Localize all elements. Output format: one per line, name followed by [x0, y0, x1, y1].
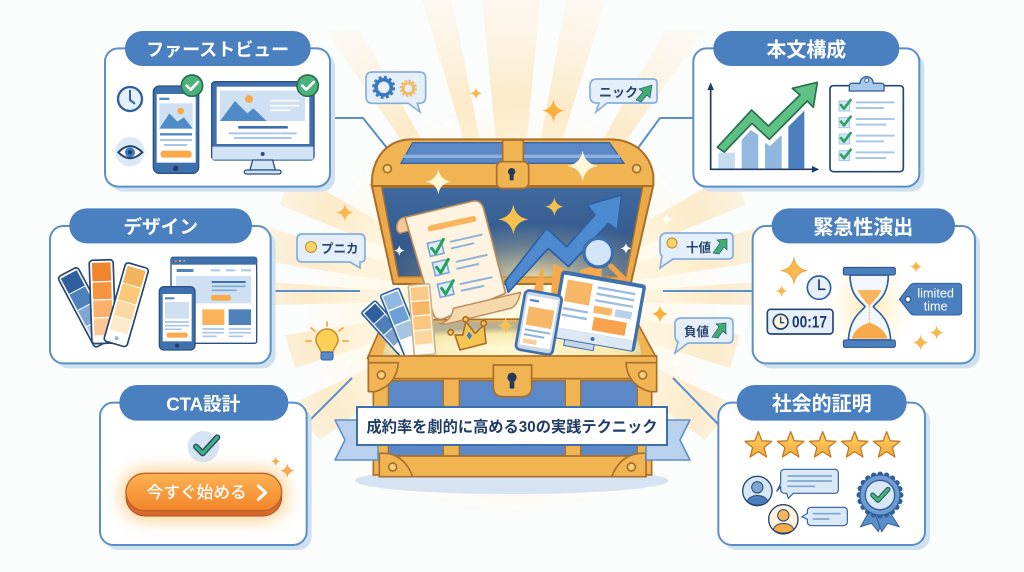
heading pill	[772, 208, 955, 243]
heading pill: ファーストビュー	[146, 39, 289, 60]
heading pill	[119, 385, 288, 421]
phone in chest	[515, 290, 562, 355]
sparkles	[776, 257, 944, 351]
icon: check	[188, 431, 219, 462]
panel frame	[105, 48, 335, 192]
title banner	[335, 407, 690, 460]
chest lock	[493, 365, 532, 397]
bubble: gears	[366, 72, 426, 112]
treasure chest	[355, 139, 668, 494]
CTA button	[126, 473, 282, 516]
heading pill: デザイン	[123, 216, 198, 237]
heading pill: 本文構成	[766, 38, 846, 62]
heading pill	[713, 31, 899, 66]
bubble: nick: ニック	[599, 85, 638, 100]
phone	[159, 287, 195, 350]
chest opening	[367, 318, 657, 358]
light rays	[270, 0, 755, 440]
connector lines	[271, 118, 753, 424]
bubble: value up: 十値	[686, 240, 712, 255]
CTA button: 今すぐ始める	[147, 483, 247, 502]
browser window	[171, 257, 257, 343]
badge: monitor check	[297, 75, 318, 96]
hourglass glow	[824, 253, 914, 360]
chest lid interior	[372, 185, 653, 284]
comment bubble	[802, 507, 847, 526]
comment bubble	[777, 469, 838, 498]
clipboard	[830, 77, 903, 172]
panel: first view	[105, 31, 335, 192]
panel: social proof	[718, 385, 930, 550]
corner brackets	[368, 363, 657, 477]
chest shadow	[355, 467, 668, 494]
bubble: value: 負値	[684, 324, 710, 339]
banner box	[357, 407, 667, 445]
panel: body structure	[693, 31, 924, 192]
banner ribbons	[335, 420, 690, 460]
avatar: blue	[743, 476, 772, 506]
panel frame	[693, 48, 924, 192]
monitor in chest	[549, 270, 646, 358]
swatches	[57, 260, 149, 348]
panel frame	[50, 226, 276, 368]
timer: 00:17	[792, 313, 827, 332]
monitor	[212, 82, 314, 174]
panel: CTA	[100, 385, 312, 550]
central glow	[302, 100, 722, 520]
chart arrow	[505, 195, 622, 300]
magnifier	[584, 238, 624, 279]
bubble: idea: プニカ	[321, 242, 359, 256]
scroll checklist	[397, 201, 521, 324]
icon: clock	[118, 87, 142, 111]
chest opening glow	[383, 322, 642, 355]
heading pill: 緊急性演出	[813, 216, 913, 239]
panel frame	[753, 226, 980, 368]
outer sparkles	[336, 87, 680, 368]
sparkles	[271, 457, 295, 478]
colour palettes	[361, 284, 436, 361]
heading pill	[737, 385, 907, 421]
heading pill: 社会的証明	[772, 393, 872, 416]
phone	[153, 86, 199, 173]
heading pill	[69, 208, 252, 243]
icon: eye	[115, 137, 145, 166]
heading pill: CTA設計	[166, 394, 241, 415]
price tag	[899, 283, 962, 315]
hourglass	[843, 267, 895, 347]
icon: clock	[807, 276, 831, 299]
panel: design	[50, 208, 276, 368]
panel frame	[718, 403, 930, 550]
panel frame	[100, 403, 312, 550]
price tag: time	[924, 299, 948, 313]
banner title: 成約率を劇的に高める30の実践テクニック	[366, 417, 658, 436]
panel: urgency	[753, 208, 980, 368]
rosette badge	[859, 474, 901, 532]
button glow	[120, 467, 288, 522]
bubble: idea	[297, 234, 365, 268]
chest lid top	[372, 139, 653, 188]
avatar: orange	[769, 505, 798, 534]
heading pill	[125, 31, 311, 66]
timer	[767, 309, 833, 334]
bar chart	[707, 82, 819, 173]
chest front	[368, 356, 657, 477]
bubble: value	[675, 318, 733, 353]
icon: light bulb	[306, 322, 348, 360]
star rating	[745, 432, 900, 457]
bubble: value up	[660, 233, 733, 268]
price tag: limited	[917, 287, 954, 301]
badge: phone check	[181, 75, 203, 96]
crown	[448, 317, 486, 350]
sparkles in chest	[394, 151, 631, 334]
bubble: nick	[590, 79, 657, 112]
